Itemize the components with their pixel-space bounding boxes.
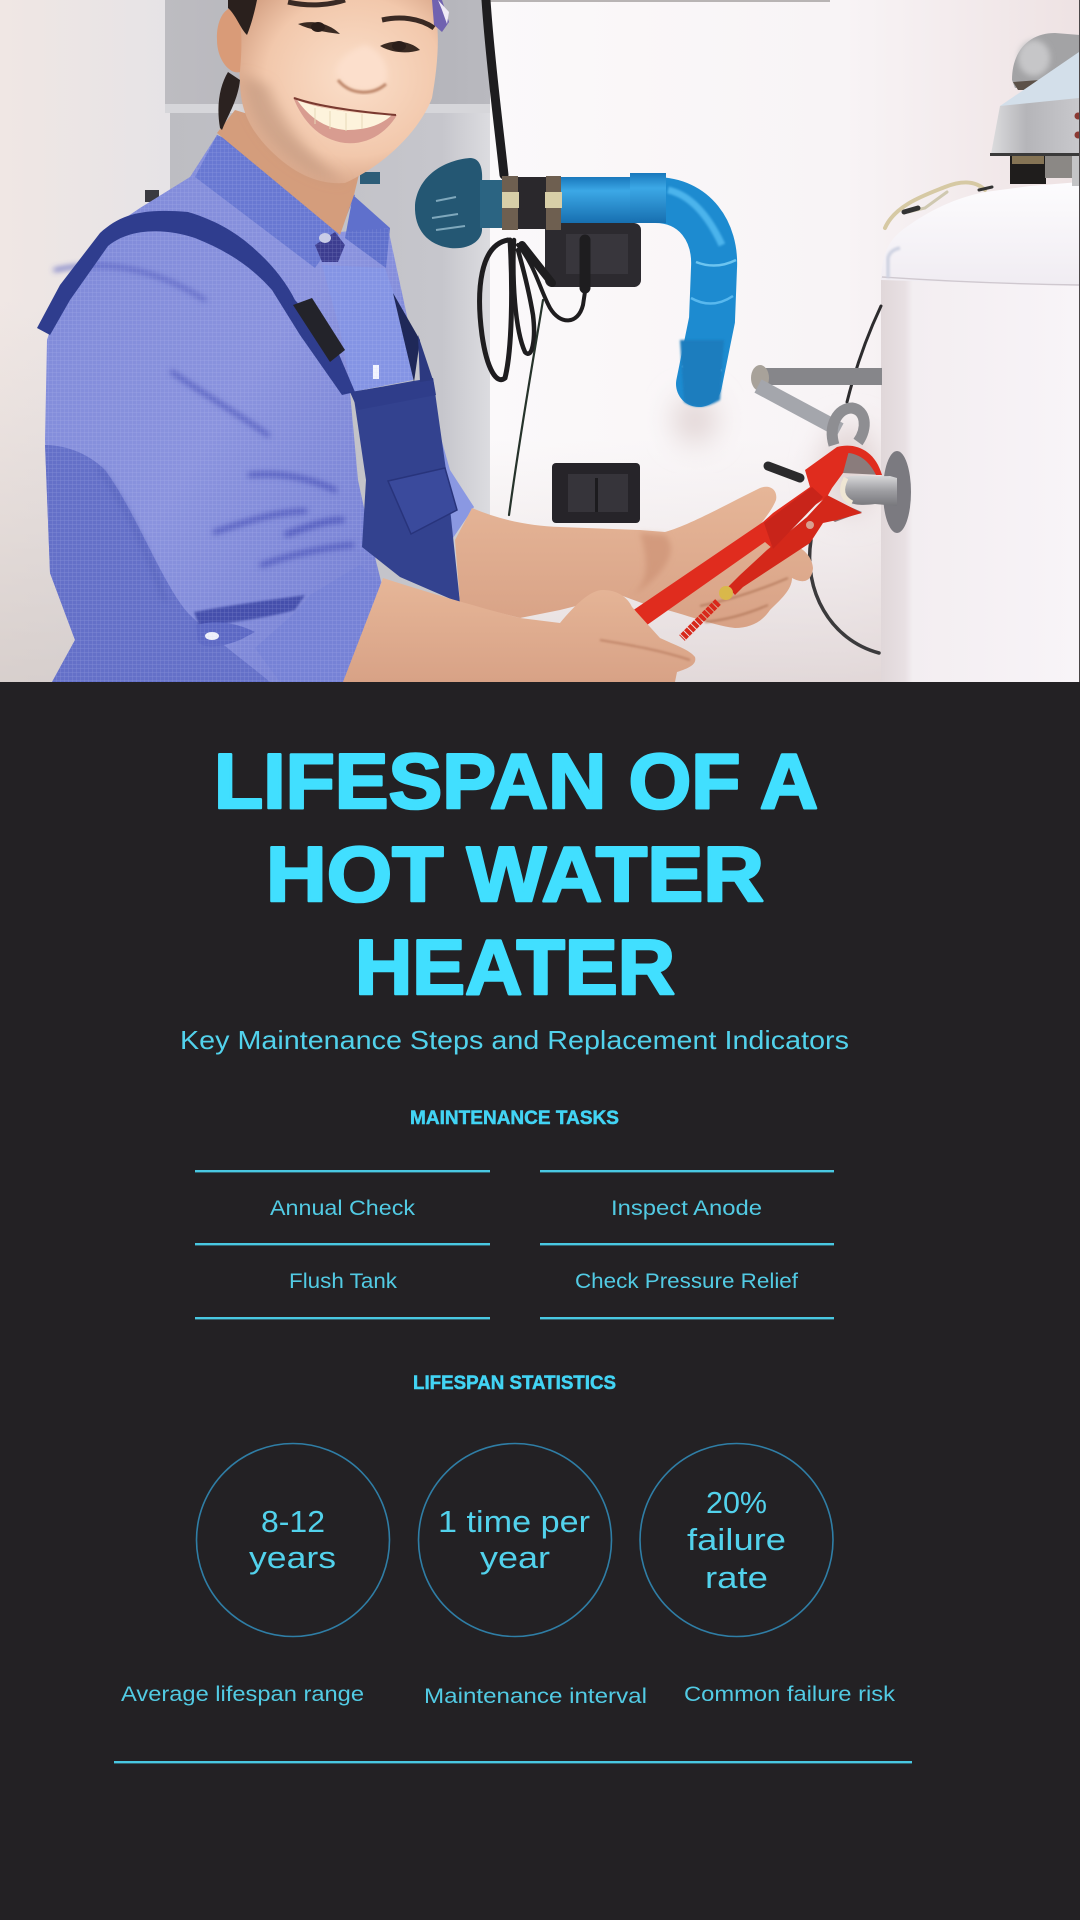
grey cylinder behind the plumber — [145, 0, 490, 602]
stat circle: 20% failure rate — [640, 1444, 833, 1636]
bottom divider — [114, 1761, 912, 1763]
stat caption: maintenance interval: Maintenance interval — [424, 1685, 647, 1708]
teal wall flange and clamps — [415, 158, 562, 248]
tank tube — [885, 182, 992, 228]
flue and fittings on top of tank — [990, 33, 1080, 186]
cap brim — [432, 0, 449, 32]
subtitle: Key Maintenance Steps and Replacement Indicators — [180, 1025, 849, 1055]
hair — [228, 0, 257, 35]
ear — [217, 8, 241, 72]
eyes — [298, 22, 340, 34]
stat caption: common failure risk: Common failure risk — [684, 1683, 896, 1706]
pipe wrench — [632, 446, 882, 638]
blue water pipe — [558, 173, 736, 407]
stat circle: 8-12 years: years — [249, 1540, 336, 1575]
stat circle: 20% failure rate: 20% — [706, 1485, 767, 1520]
left wall — [0, 0, 170, 682]
stat circle: 1 time per year: 1 time per — [438, 1504, 590, 1539]
plumber: navy overalls and straps — [37, 211, 460, 603]
face skin — [236, 0, 440, 183]
nose — [344, 46, 386, 86]
brows — [288, 0, 434, 28]
title: HEATER — [355, 923, 675, 1011]
heading: maintenance tasks: MAINTENANCE TASKS — [410, 1108, 619, 1129]
right wall with soft shadows — [485, 0, 1080, 682]
task labels: Check Pressure Relief — [575, 1270, 798, 1293]
task labels: Flush Tank — [289, 1270, 398, 1293]
stat circle: 20% failure rate: rate — [705, 1560, 768, 1595]
wall sockets — [545, 223, 641, 523]
stat circle: 8-12 years: 8-12 — [261, 1504, 325, 1539]
silver pipes near the wrench — [751, 365, 911, 533]
plumber: neck and head — [217, 0, 449, 235]
title — [214, 737, 818, 1011]
plumber: forearm and gripping hand — [455, 487, 813, 628]
task labels: Inspect Anode — [611, 1197, 762, 1220]
jaw stubble shading — [240, 76, 334, 178]
heading: lifespan statistics: LIFESPAN STATISTICS — [413, 1373, 616, 1394]
black cables — [480, 0, 881, 653]
smile — [293, 97, 397, 143]
maintenance task table — [195, 1170, 834, 1319]
title: HOT WATER — [266, 830, 764, 918]
stat circle: 1 time per year — [418, 1444, 612, 1636]
stat circle: 1 time per year: year — [480, 1540, 550, 1575]
stat caption: average lifespan range: Average lifespan range — [121, 1683, 364, 1706]
right edge of photo — [1079, 0, 1080, 682]
task labels — [270, 1197, 798, 1293]
plumber: shirt — [45, 135, 474, 682]
stat circle: 20% failure rate: failure — [687, 1522, 786, 1557]
water heater tank — [881, 182, 1080, 682]
plumber: second forearm and hand — [343, 578, 695, 682]
title: LIFESPAN OF A — [214, 737, 818, 825]
task labels: Annual Check — [270, 1197, 416, 1220]
stat circle: 8-12 years — [196, 1444, 390, 1636]
hero photo: smiling plumber repairing a hot water heater — [0, 0, 1080, 682]
